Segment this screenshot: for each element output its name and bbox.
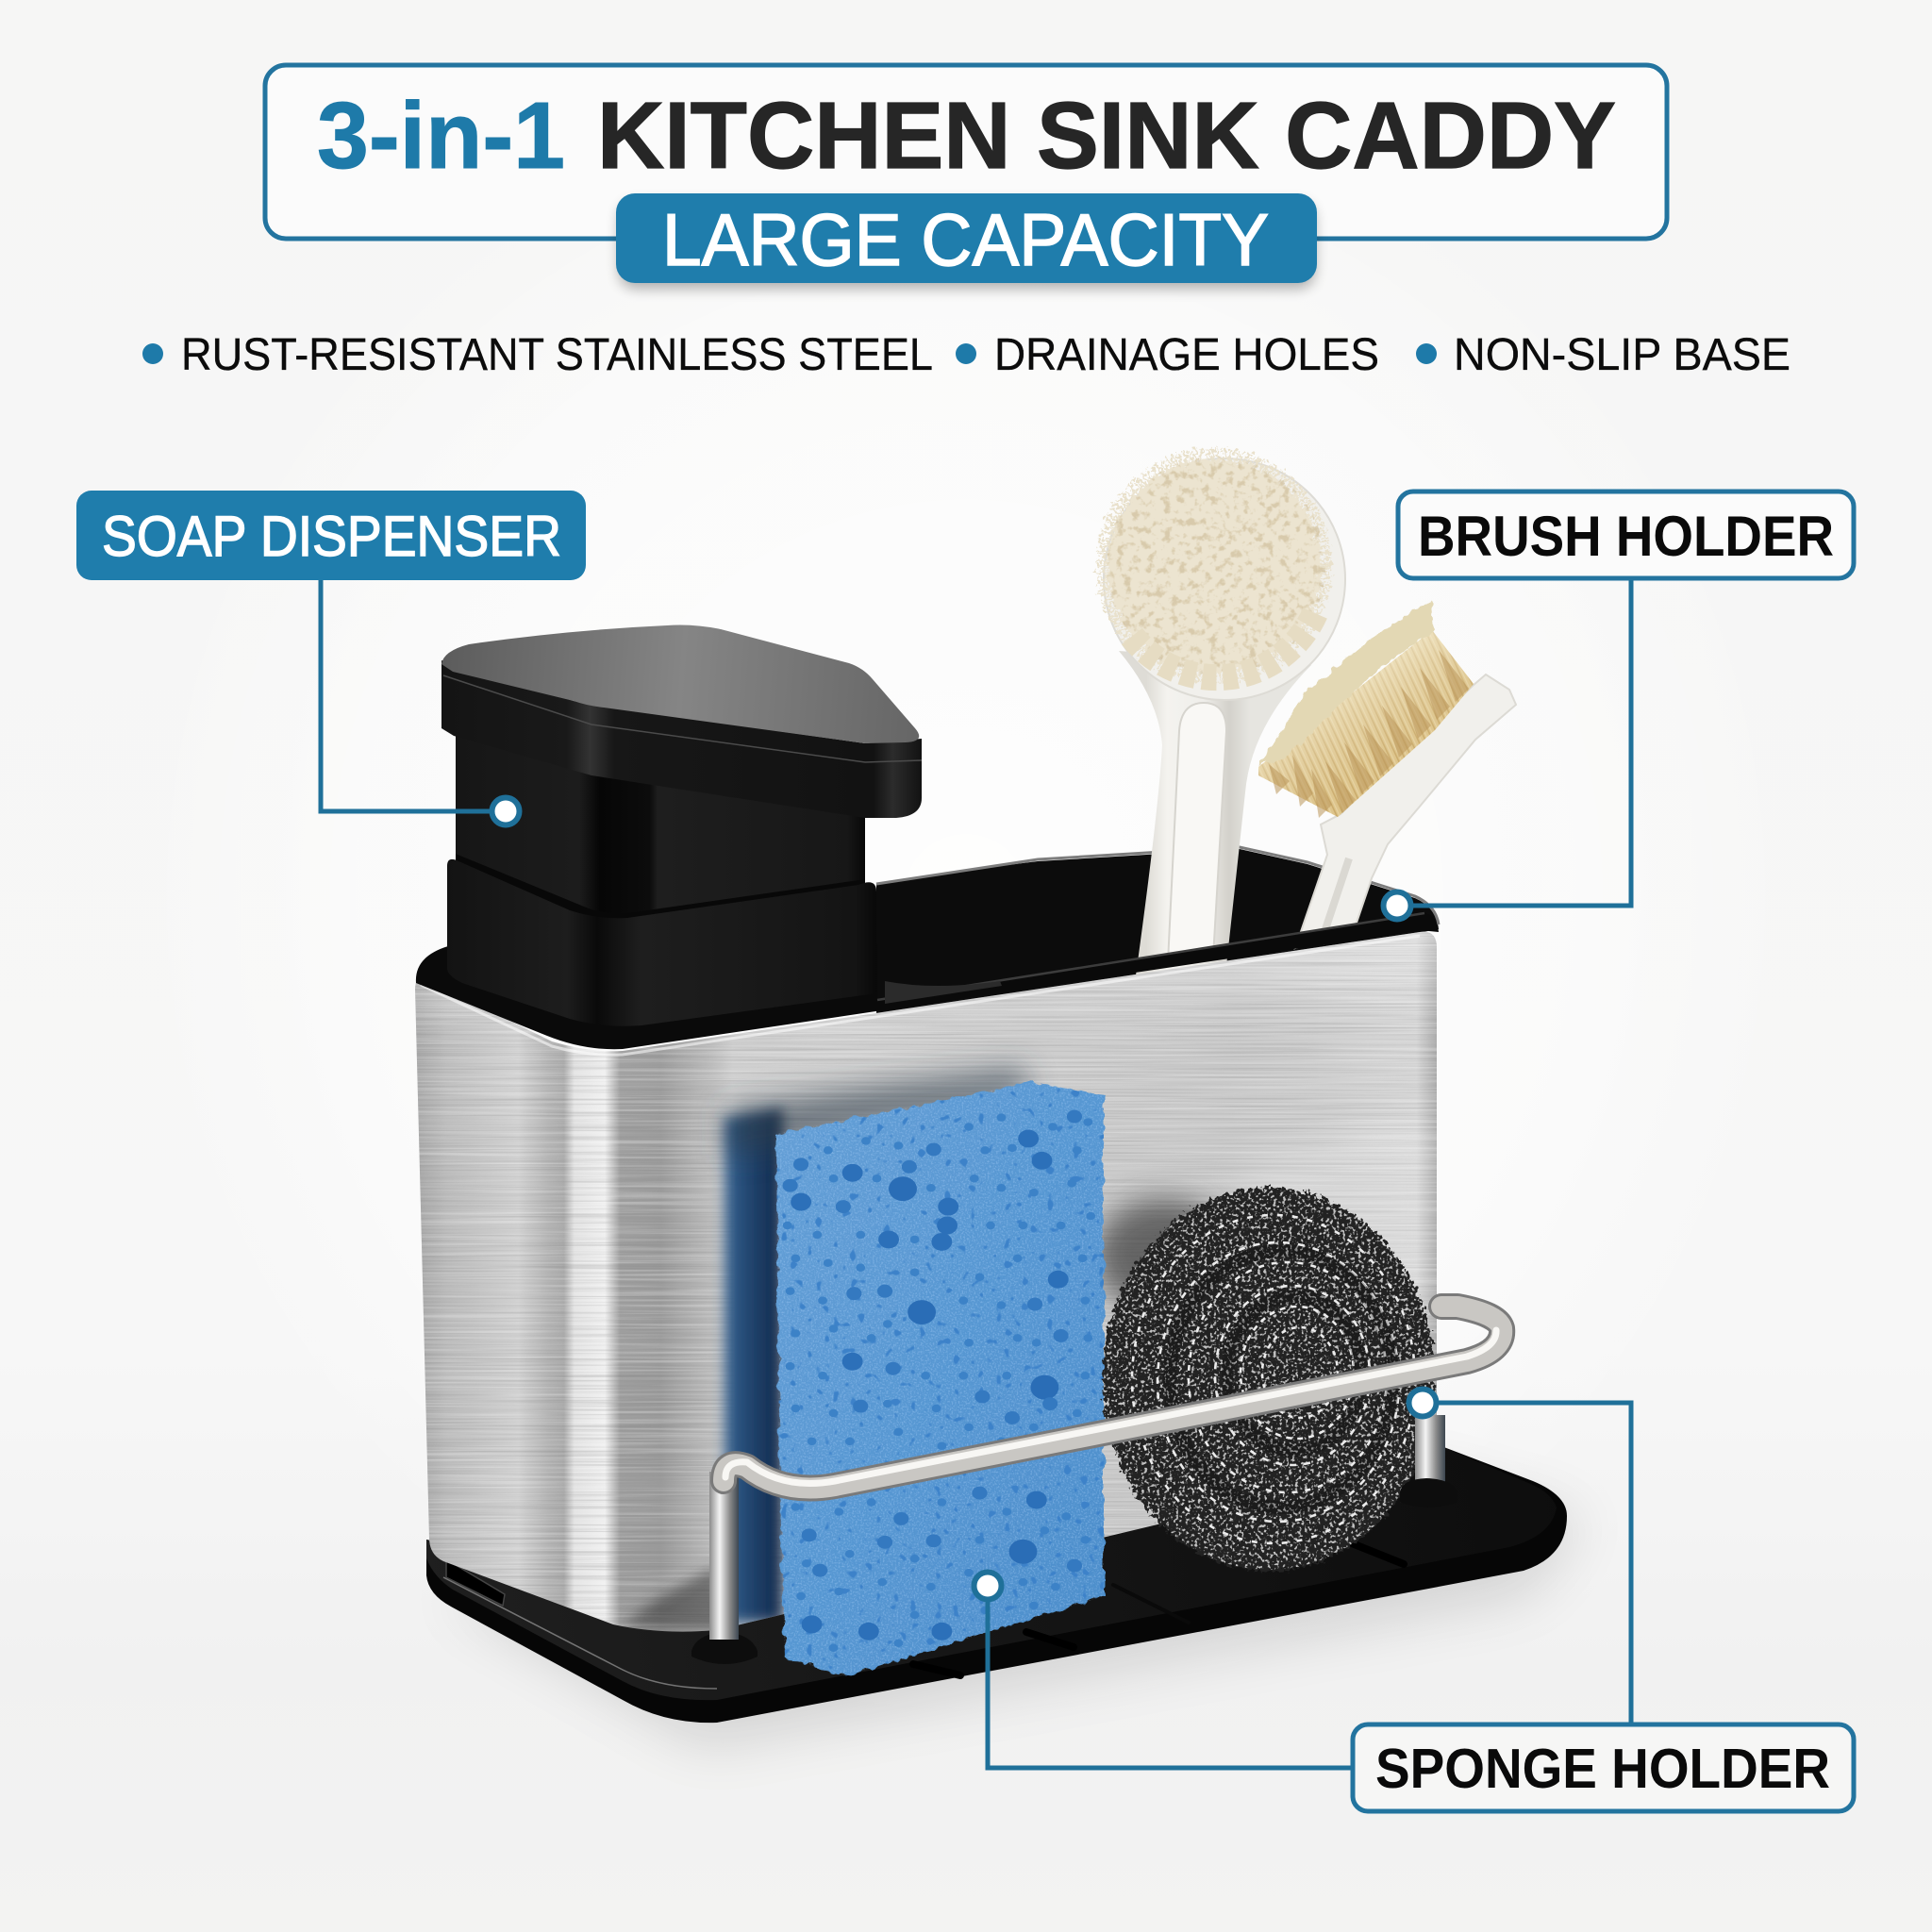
drainage slots: front [913, 1543, 1404, 1675]
left foot [691, 1632, 758, 1664]
label box [76, 491, 586, 580]
steel wool scrubber [1103, 1188, 1435, 1571]
holder inner deck [885, 981, 1002, 1004]
brush body [1295, 675, 1516, 948]
head top [441, 625, 919, 743]
label text: BRUSH HOLDER [1418, 505, 1834, 568]
callout: sponge holder [974, 1389, 1854, 1811]
holder front lip highlight [877, 913, 1424, 1000]
bristle top surface [1258, 600, 1434, 765]
leader line [1406, 577, 1631, 906]
callout: soap dispenser [76, 491, 586, 824]
black tray base [426, 1443, 1567, 1723]
handle center ridge [1168, 703, 1226, 962]
feature bullets [142, 330, 1790, 380]
head edge line [443, 675, 922, 762]
handle [1119, 651, 1311, 975]
pump neck [456, 734, 865, 913]
soap dispenser pump [441, 625, 922, 1026]
wool spiral glints [1132, 1215, 1415, 1543]
top edge highlight [421, 936, 1420, 1055]
right foot [1400, 1478, 1457, 1507]
drainage slot: left side [446, 1559, 505, 1606]
bottom shadow [623, 1562, 709, 1632]
marker dot [492, 798, 519, 824]
feature bullets: DRAINAGE HOLES [994, 330, 1379, 380]
left post [709, 1472, 739, 1640]
reflection of sponge on steel [724, 1108, 783, 1623]
badge shadow [619, 202, 1315, 289]
badge: large capacity: LARGE CAPACITY [662, 198, 1269, 281]
title box [265, 65, 1667, 239]
bristle shadow tufts [1269, 650, 1469, 818]
collar [447, 859, 876, 1026]
marker dot on sponge [974, 1572, 1002, 1600]
holder rim highlight [876, 847, 1439, 924]
lower bright region [1260, 1128, 1437, 1311]
label text: SOAP DISPENSER [102, 505, 561, 568]
callout: brush holder [1383, 491, 1854, 919]
feature bullets: RUST-RESISTANT STAINLESS STEEL [181, 330, 933, 380]
title frame with heading and badge [265, 65, 1667, 289]
marker dot [1383, 892, 1411, 919]
reflection of steel wool [1094, 1198, 1236, 1311]
label box [1353, 1724, 1854, 1811]
rail bar [724, 1307, 1502, 1489]
sponge [769, 1075, 1113, 1689]
wool shadow bands [1170, 1251, 1392, 1507]
leader line to sponge [988, 1586, 1353, 1768]
neck base filler [456, 811, 865, 943]
marker dot on rail [1409, 1389, 1436, 1417]
bristle teeth [1130, 613, 1315, 677]
round brush [1102, 453, 1345, 975]
feature bullets: NON-SLIP BASE [1454, 330, 1790, 380]
bristles [1102, 454, 1326, 678]
label box [1398, 491, 1854, 578]
bristle sides [1258, 630, 1474, 817]
product: sink caddy [415, 453, 1567, 1723]
stainless steel body [415, 924, 1443, 1641]
leader line [321, 580, 495, 811]
floor shadow [443, 1472, 1585, 1745]
sponge rail [691, 1307, 1502, 1664]
right post [1415, 1415, 1445, 1486]
flat brush [1258, 600, 1516, 948]
head side [441, 660, 922, 818]
heading: 3-in-1: 3-in-1 [317, 83, 565, 189]
heading: kitchen sink caddy: KITCHEN SINK CADDY [597, 83, 1616, 189]
brush base [1104, 458, 1345, 700]
leader line to steel rail [1423, 1403, 1631, 1724]
holder back and black interior [876, 849, 1439, 1028]
black rim over steel [416, 913, 1439, 1049]
label text: SPONGE HOLDER [1375, 1738, 1830, 1800]
sponge pores [788, 1117, 1091, 1648]
